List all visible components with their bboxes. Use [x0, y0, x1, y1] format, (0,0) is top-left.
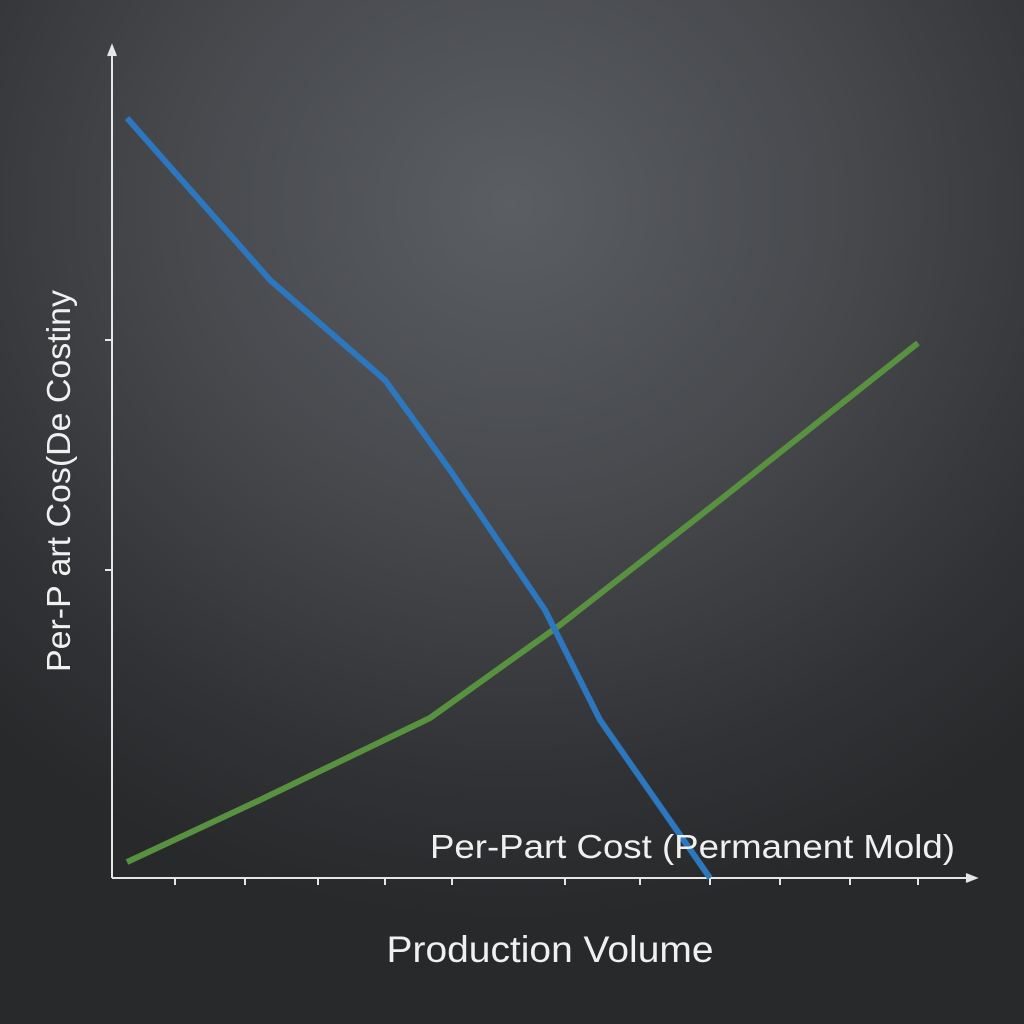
line: blue — [127, 118, 710, 878]
y axis title: Per-P art Cos(De Costiny — [40, 289, 77, 672]
x axis — [112, 874, 976, 885]
x axis title: Production Volume — [386, 929, 714, 970]
line: green — [127, 343, 918, 862]
legend label: Per-Part Cost (Permanent Mold) — [430, 828, 955, 865]
y axis — [105, 46, 116, 878]
